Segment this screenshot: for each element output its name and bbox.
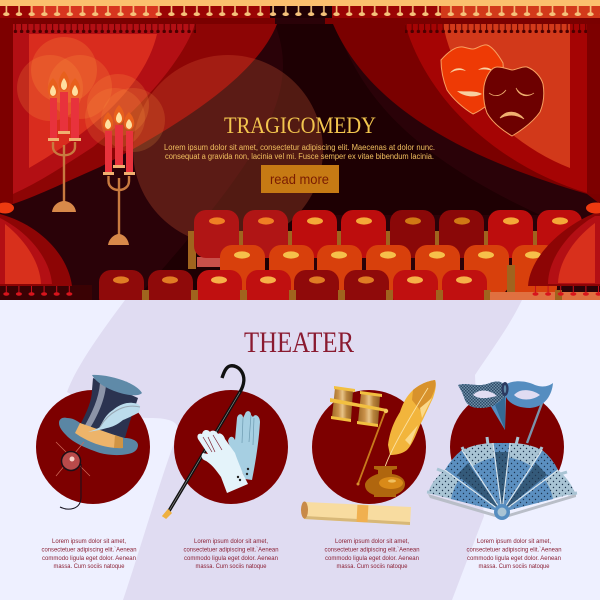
title: theater: THEATER xyxy=(244,326,354,359)
icon: folding fan xyxy=(427,437,577,520)
icon: monocle xyxy=(56,442,90,509)
button: read more xyxy=(261,165,339,193)
text block: opera caption xyxy=(324,538,420,570)
theater masks xyxy=(441,45,544,136)
text block: gloves caption: commodo ligula eget dolor. Aenean xyxy=(184,555,278,562)
panel: lower section background xyxy=(0,300,600,600)
text block: gloves caption xyxy=(184,538,279,570)
canopy left xyxy=(0,202,92,300)
dark backdrop curtains xyxy=(135,24,540,300)
icon: white glove xyxy=(197,430,248,493)
text block: hat caption: consectetuer adipiscing elit.`Aenean xyxy=(42,546,137,554)
candelabra left xyxy=(17,37,112,212)
text block: hat caption: Lorem ipsum dolor sit amet, xyxy=(52,538,126,545)
icon: opera glasses xyxy=(330,386,388,486)
icon: top hat xyxy=(59,375,142,455)
top gold fringe xyxy=(0,0,600,16)
text block: gloves caption: Lorem ipsum dolor sit amet, xyxy=(194,538,268,545)
icon: ink pot xyxy=(365,466,405,497)
text block: opera caption: massa. Cum sociis natoque xyxy=(336,563,408,570)
stage description text: Lorem ipsum dolor sit amet, consectetur adipiscing elit. Maecenas at dolor nunc. xyxy=(164,143,435,152)
stage valance xyxy=(0,6,600,33)
text block: mask caption: massa. Cum sociis natoque xyxy=(478,563,550,570)
seats: middle row xyxy=(220,245,557,300)
panel: stage scene xyxy=(0,0,600,310)
text block: mask caption: Lorem ipsum dolor sit amet, xyxy=(477,538,551,545)
spotlight glow xyxy=(133,55,323,245)
text block: mask caption xyxy=(466,538,562,570)
panel: gloves circle xyxy=(174,390,288,504)
text block: hat caption xyxy=(42,538,137,570)
panel: opera circle xyxy=(312,390,426,504)
stage description text xyxy=(164,143,435,161)
icon: blue glove xyxy=(228,411,260,480)
button: read more: read more xyxy=(270,171,329,187)
text block: gloves caption: massa. Cum sociis natoque xyxy=(196,563,267,570)
left curtain xyxy=(0,18,277,204)
canopy right xyxy=(490,202,600,300)
stage description text: consequat a gravida non, lacinia vel mi. Fusce semper ex vitae bibendum lacinia. xyxy=(165,152,434,161)
text block: opera caption: Lorem ipsum dolor sit amet, xyxy=(335,538,409,545)
text block: mask caption: consectetuer adipiscing elit.`Aenean xyxy=(466,546,562,554)
seats: front row xyxy=(99,270,491,310)
text block: opera caption: consectetuer adipiscing elit.`Aenean xyxy=(324,546,420,554)
icon: quill feather xyxy=(385,380,436,467)
icon: cane xyxy=(163,366,244,518)
candelabra right xyxy=(85,74,165,245)
text block: hat caption: commodo ligula eget dolor. Aenean xyxy=(42,555,136,562)
panel: hat circle xyxy=(36,390,150,504)
icon: mask on stick xyxy=(458,381,553,443)
title: tragicomedy: TRAGICOMEDY xyxy=(224,113,376,138)
seats: back row xyxy=(188,210,582,269)
text block: gloves caption: consectetuer adipiscing elit.`Aenean xyxy=(184,546,279,554)
text block: hat caption: massa. Cum sociis natoque xyxy=(54,563,125,570)
panel: mask circle xyxy=(450,390,564,504)
icon: scroll xyxy=(301,502,411,525)
text block: mask caption: commodo ligula eget dolor. Aenean xyxy=(467,555,561,562)
right curtain xyxy=(333,24,600,204)
text block: opera caption: commodo ligula eget dolor. Aenean xyxy=(325,555,419,562)
